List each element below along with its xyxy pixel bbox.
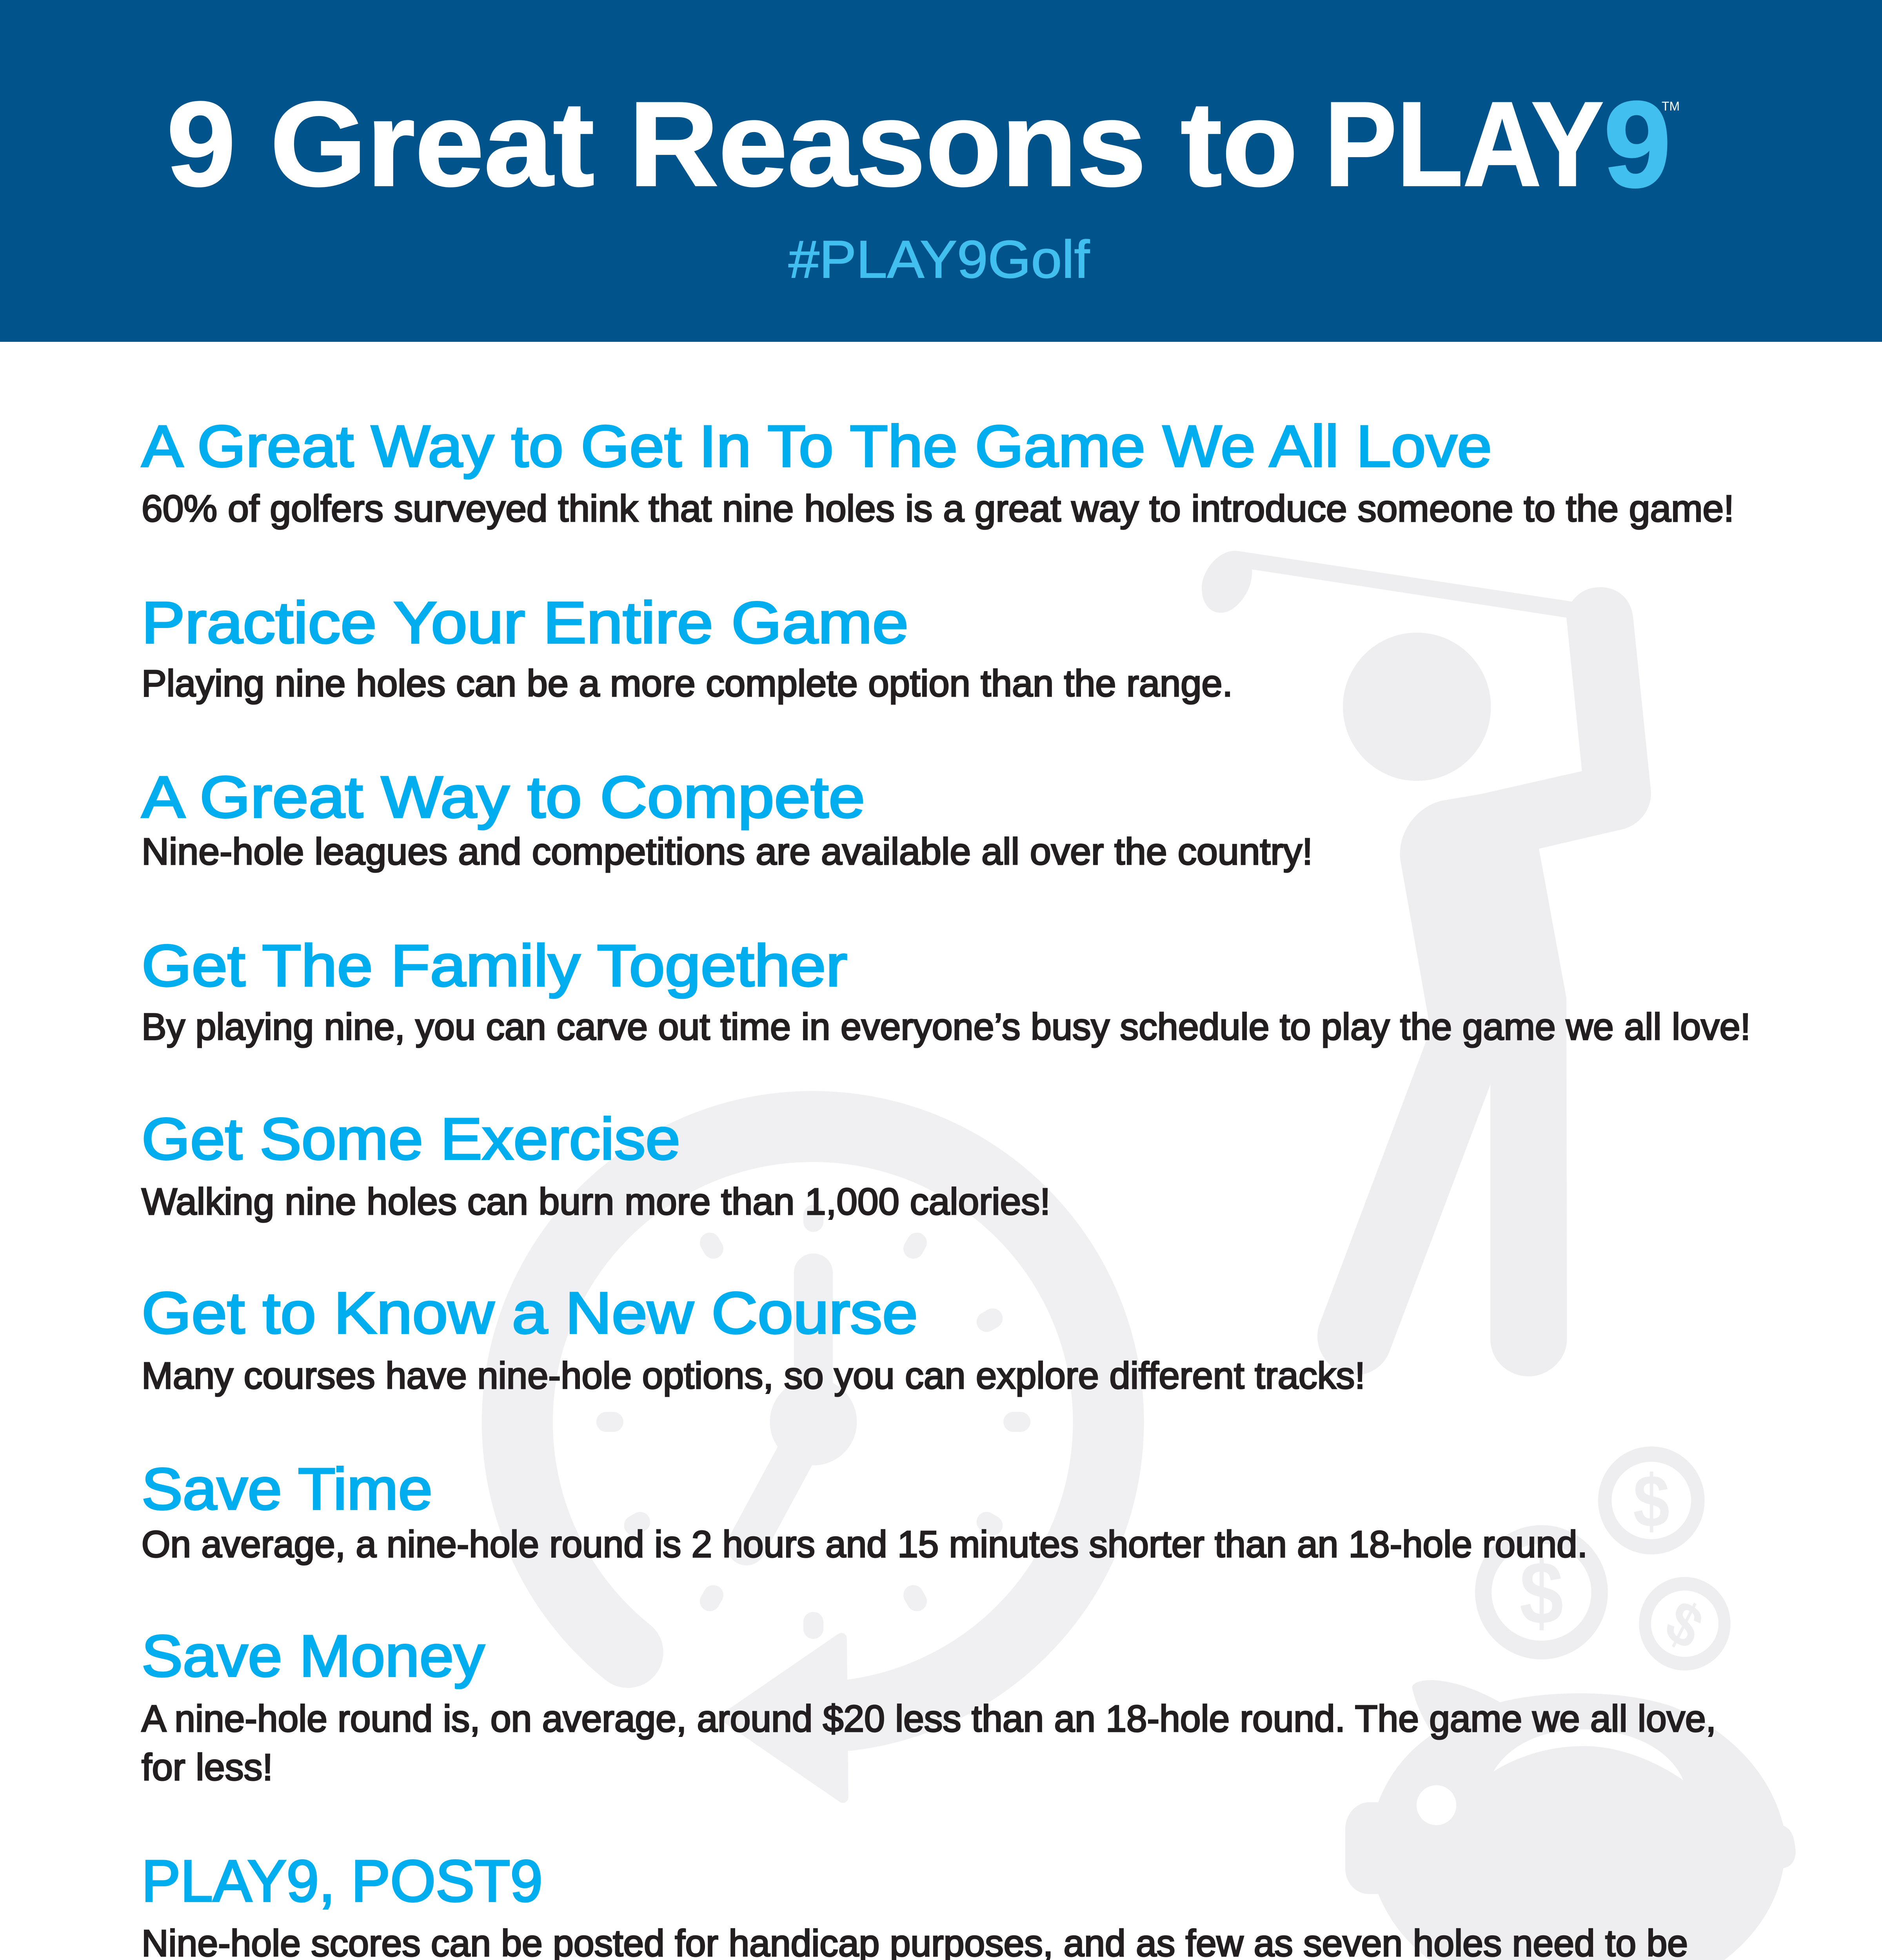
reason 7: On average, a nine-hole round is 2 hours and 15 minutes shorter than an 18-hole round. — [142, 1523, 1588, 1565]
icon: piggy bank with coins — [1345, 1454, 1796, 1960]
reason 2: Practice Your Entire Game — [142, 590, 908, 655]
reason 3: Nine-hole leagues and competitions are available all over the country! — [142, 831, 1313, 873]
reason 5 — [142, 1106, 1050, 1223]
reason 7 — [142, 1456, 1588, 1565]
icon: golfer silhouette — [1202, 551, 1651, 1376]
reason 5: Walking nine holes can burn more than 1,000 calories! — [142, 1181, 1050, 1223]
coin right: $ — [1656, 1586, 1713, 1663]
reason 5: Get Some Exercise — [142, 1106, 680, 1172]
reason 6: Get to Know a New Course — [142, 1280, 918, 1346]
header banner — [0, 0, 1882, 342]
title: TM — [1662, 99, 1680, 113]
icon: clock with arrow — [517, 1127, 1108, 1797]
reason 6: Many courses have nine-hole options, so you can explore different tracks! — [142, 1355, 1365, 1397]
reason 8 — [142, 1623, 1716, 1788]
reason 4 — [142, 933, 1751, 1048]
reason 2 — [142, 590, 1233, 704]
reason 4: By playing nine, you can carve out time in everyone’s busy schedule to play the game we all love! — [142, 1006, 1751, 1048]
coin left: $ — [1520, 1543, 1563, 1643]
reason 8: Save Money — [142, 1623, 485, 1689]
title: 9 — [1604, 76, 1671, 213]
title: PLAY — [1324, 77, 1604, 211]
reason 1 — [142, 413, 1734, 530]
reason 3 — [142, 764, 1313, 873]
reason 9 — [142, 1848, 1688, 1960]
reason 9: PLAY9, POST9 — [142, 1848, 543, 1914]
pig body — [1345, 1680, 1796, 1960]
coin top: $ — [1633, 1459, 1669, 1543]
coin left — [1483, 1534, 1600, 1650]
reason 3: A Great Way to Compete — [142, 764, 865, 830]
reason 8: A nine-hole round is, on average, around $20 less than an 18-hole round. The game we all love, — [142, 1698, 1716, 1740]
reason 1: A Great Way to Get In To The Game We All Love — [142, 413, 1492, 479]
coin right — [1645, 1584, 1724, 1664]
hashtag: #PLAY9Golf — [788, 230, 1090, 289]
reason 2: Playing nine holes can be a more complete option than the range. — [142, 662, 1233, 704]
reason 4: Get The Family Together — [142, 933, 847, 998]
reason 6 — [142, 1280, 1365, 1397]
reason 7: Save Time — [142, 1456, 432, 1522]
reason 1: 60% of golfers surveyed think that nine holes is a great way to introduce someone to the game! — [142, 488, 1734, 530]
reason 8: for less! — [142, 1746, 273, 1788]
coin top — [1605, 1454, 1698, 1547]
title: 9 Great Reasons to — [167, 77, 1298, 211]
